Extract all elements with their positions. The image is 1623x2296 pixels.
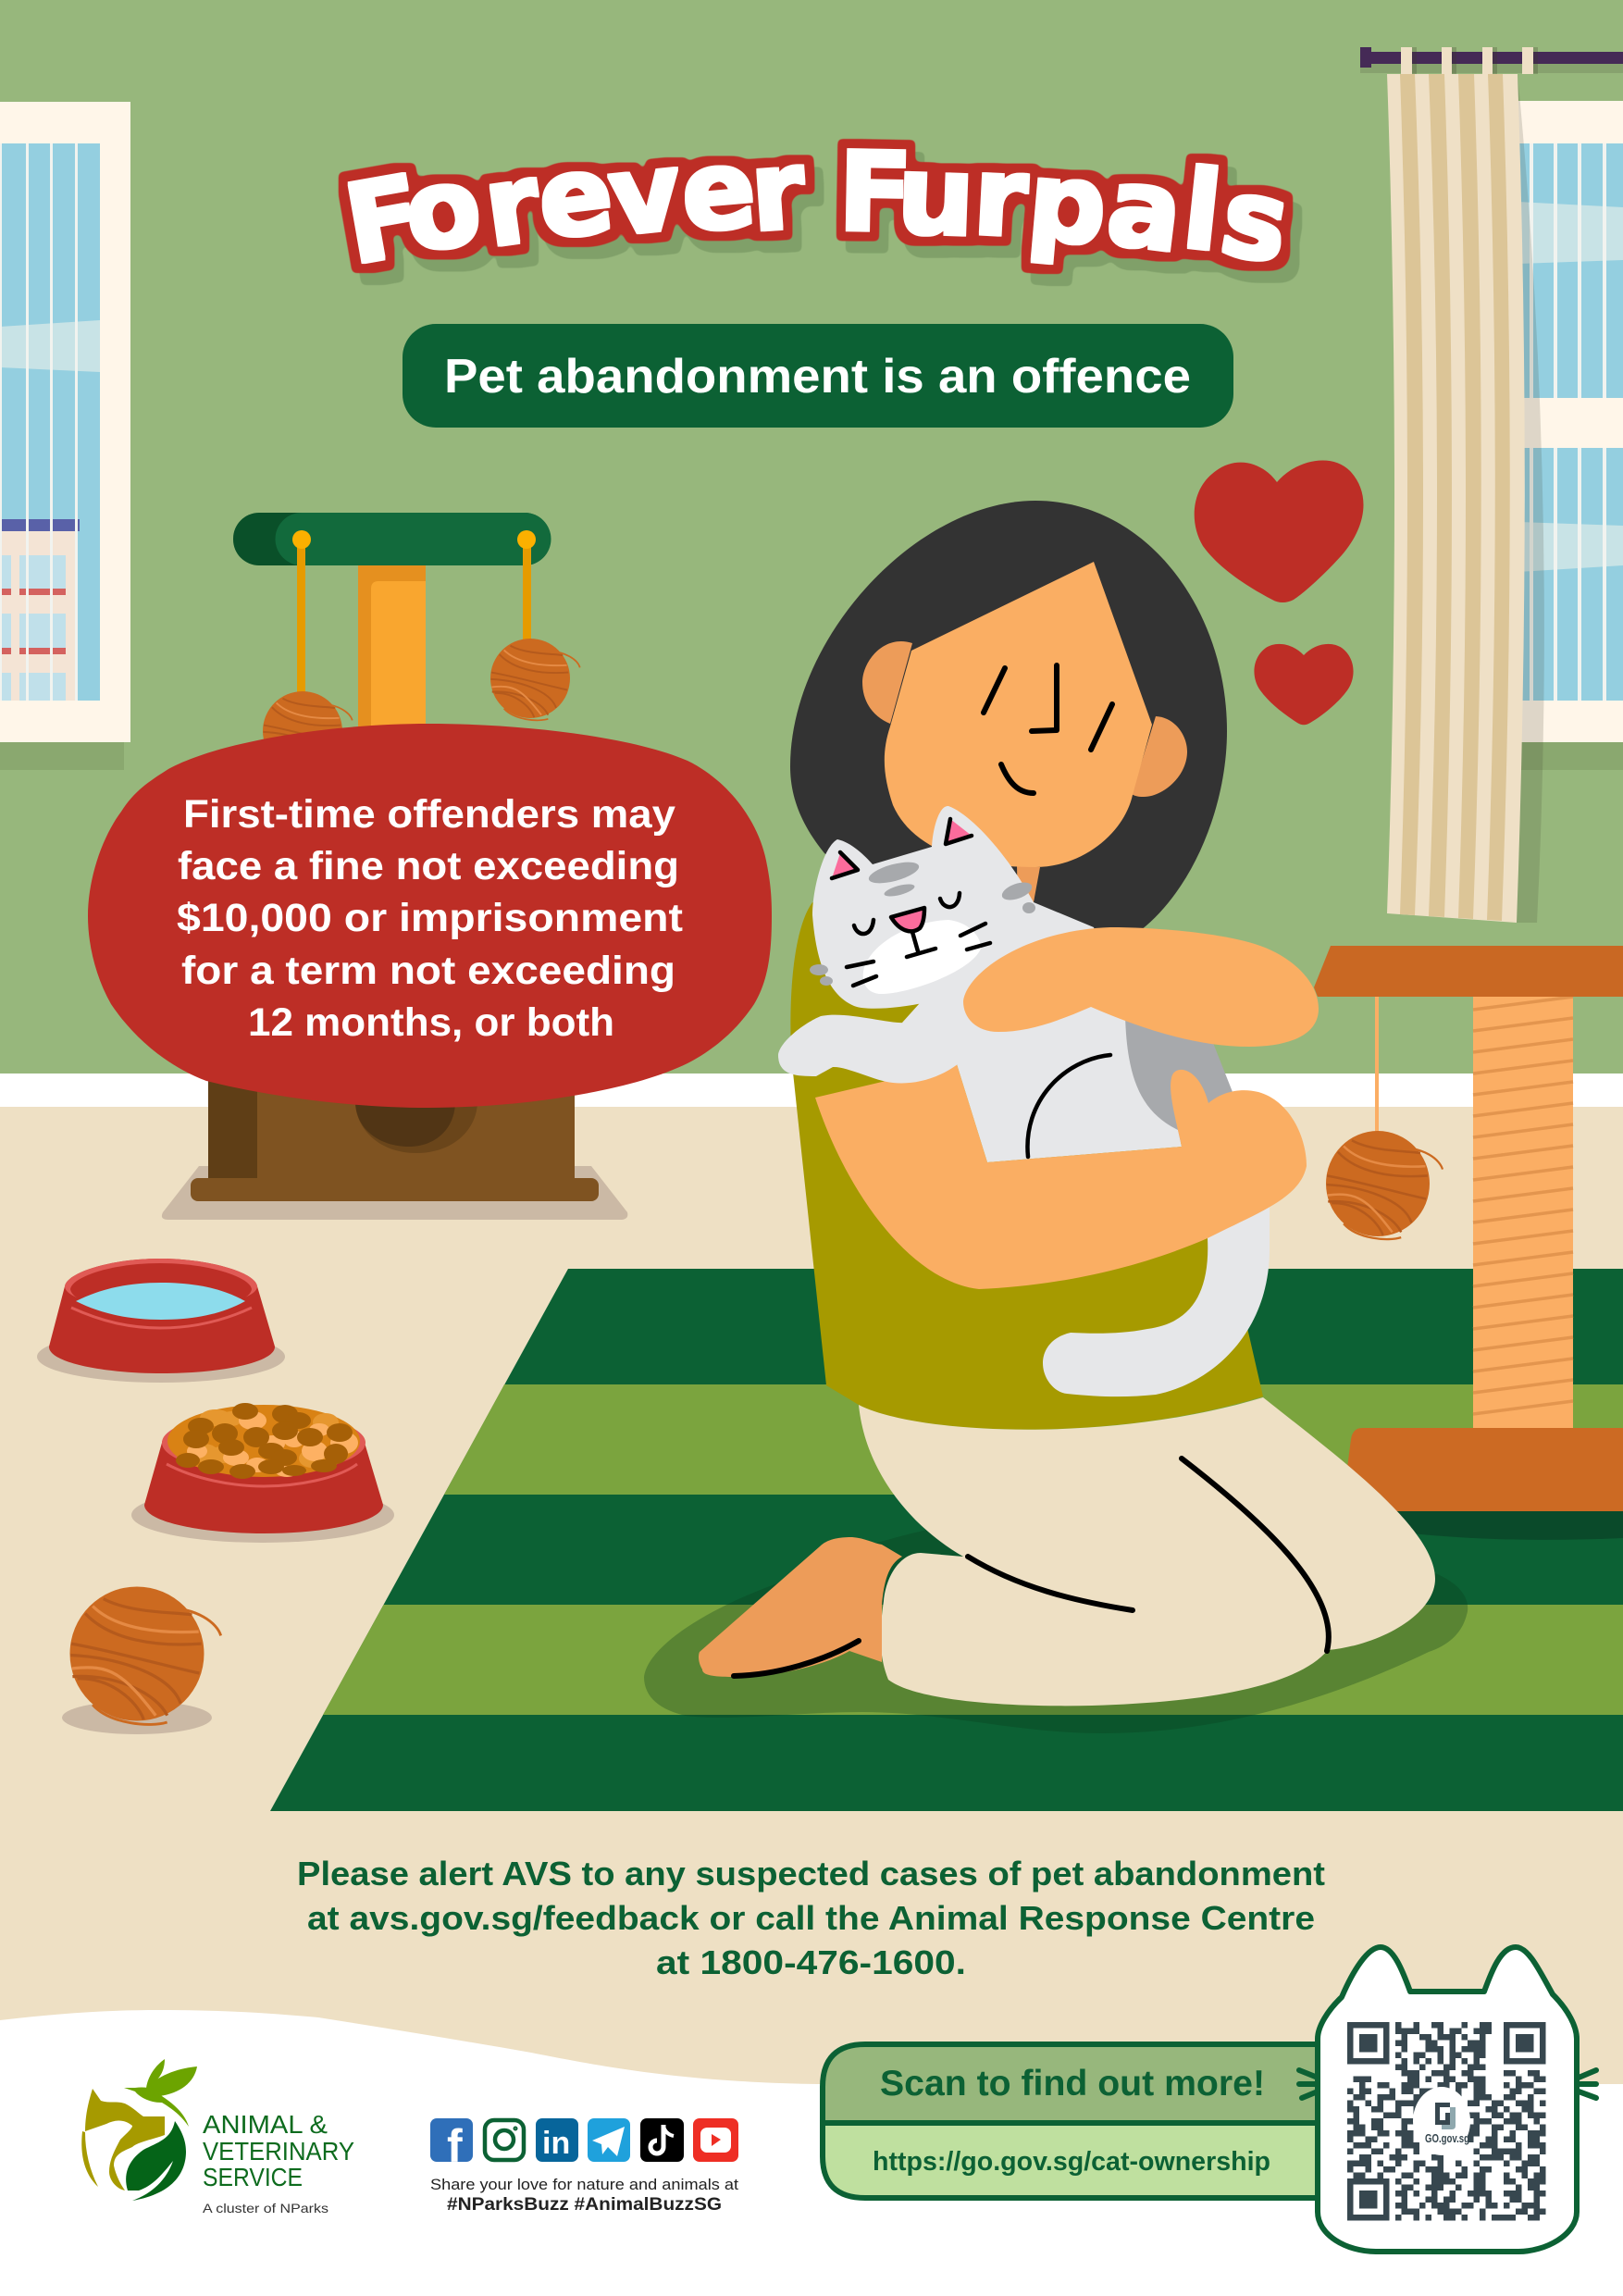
subtitle pill — [403, 324, 1233, 428]
callout: penalty: 12 months, or both — [248, 1000, 614, 1045]
trousers — [859, 1397, 1435, 1706]
callout: penalty: $10,000 or imprisonment — [177, 896, 683, 940]
social media icons: #NParksBuzz #AnimalBuzzSG — [447, 2195, 722, 2215]
yarn ball on floor — [62, 1586, 221, 1734]
cat body line — [1027, 1055, 1110, 1157]
AVS logo — [81, 2059, 354, 2215]
hair — [790, 501, 1227, 935]
cat ears — [832, 819, 972, 878]
curtain and rod — [1360, 47, 1623, 923]
callout: penalty: for a term not exceeding — [181, 949, 675, 993]
kibble — [176, 1403, 358, 1479]
social caption: Share your love for nature and animals at — [430, 2176, 738, 2193]
GO.gov.sg badge: GO.gov.sg — [1425, 2131, 1469, 2145]
leg and foot lines — [734, 1458, 1329, 1676]
AVS logo: ANIMAL & — [203, 2110, 328, 2139]
GO.gov.sg badge — [1413, 2087, 1470, 2155]
hearts — [1195, 460, 1363, 725]
water bowl — [37, 1259, 285, 1383]
scan panel: https://go.gov.sg/cat-ownership — [873, 2147, 1270, 2177]
neck — [1017, 865, 1040, 912]
white footer wave — [0, 2010, 1623, 2296]
cat body — [902, 902, 1182, 1162]
left ear — [862, 641, 912, 724]
baseboard — [0, 1074, 1623, 1107]
foot — [699, 1537, 902, 1677]
facial features — [984, 665, 1112, 793]
AVS logo: VETERINARY — [203, 2137, 354, 2166]
food bowl — [131, 1403, 394, 1543]
upper arm — [963, 927, 1319, 1047]
cat house — [162, 1064, 627, 1220]
title: Forever Furpals — [336, 123, 1298, 290]
scan panel: Scan to find out more! — [880, 2064, 1265, 2104]
icon: telegram — [588, 2118, 630, 2162]
callout: penalty: face a fine not exceeding — [178, 844, 679, 888]
right window — [1518, 101, 1623, 770]
striped rug — [270, 1269, 1623, 1811]
call to action text: at avs.gov.sg/feedback or call the Animal Response Centre — [307, 1899, 1315, 1937]
icon: tiktok — [640, 2118, 684, 2162]
cat back shade — [1110, 1009, 1236, 1148]
icon: youtube — [693, 2118, 738, 2162]
subtitle pill: Pet abandonment is an offence — [444, 350, 1191, 403]
icon: facebook — [430, 2118, 473, 2172]
icon: linkedin — [536, 2118, 578, 2162]
icon: linkedin: in — [542, 2126, 570, 2161]
whiskers — [1299, 2070, 1596, 2098]
cat head — [812, 806, 1046, 1009]
QR code — [1347, 2022, 1545, 2221]
call to action text: Please alert AVS to any suspected cases of pet abandonment — [297, 1855, 1325, 1893]
icon: instagram — [485, 2120, 524, 2160]
social media icons — [430, 2118, 738, 2215]
cat face details — [847, 893, 990, 986]
cat paw — [778, 1015, 958, 1083]
person hugging cat — [644, 460, 1468, 1733]
card outline — [1318, 1947, 1577, 2252]
face — [885, 562, 1152, 867]
logo mark — [81, 2059, 197, 2201]
shirt — [790, 902, 1263, 1430]
callout: penalty — [88, 724, 772, 1108]
call to action text — [297, 1855, 1325, 1981]
cat tail — [1043, 1203, 1270, 1396]
call to action text: at 1800-476-1600. — [656, 1943, 966, 1981]
callout: penalty: First-time offenders may — [183, 792, 675, 837]
right ear — [1132, 716, 1187, 797]
AVS logo: A cluster of NParks — [203, 2201, 328, 2215]
floor shadow — [644, 1530, 1468, 1733]
cat-shaped QR card — [1299, 1947, 1596, 2252]
cat tree with hanging yarn — [233, 513, 580, 773]
cat tabby marks — [810, 858, 1035, 986]
scratching post — [1314, 946, 1623, 1540]
wall background — [0, 0, 1623, 1074]
scan panel — [823, 2044, 1332, 2198]
icon: facebook: f — [447, 2120, 463, 2172]
lower arm — [815, 1064, 1307, 1289]
cat muzzle — [863, 920, 981, 994]
floor — [0, 1107, 1623, 2296]
left window — [0, 102, 130, 770]
AVS logo: SERVICE — [203, 2163, 303, 2191]
